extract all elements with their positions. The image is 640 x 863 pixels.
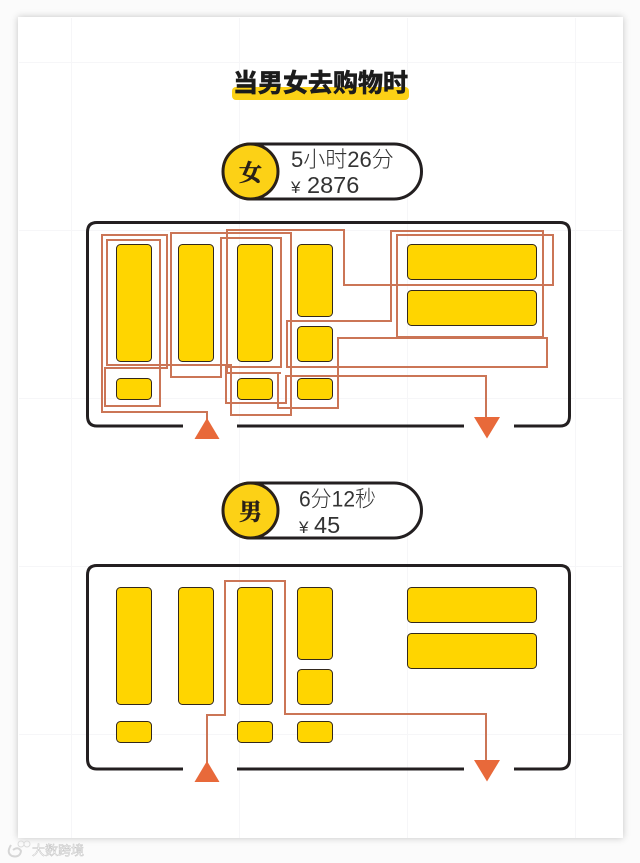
badge: female time and spend: 2876	[307, 172, 359, 198]
badge: female time and spend: ¥	[290, 178, 301, 197]
watermark: 大数跨境	[32, 843, 84, 858]
exit arrow	[474, 760, 500, 782]
store outline	[88, 566, 570, 769]
entrance arrow	[194, 761, 220, 782]
badge: female time and spend: 女	[239, 160, 263, 186]
badge: male time and spend: 男	[239, 500, 262, 524]
badge: male time and spend: ¥	[298, 518, 309, 537]
female walking route	[102, 230, 553, 420]
male walking route	[207, 581, 486, 763]
store outline	[88, 222, 570, 426]
title: 当男女去购物时	[233, 70, 408, 98]
badge: male time and spend	[223, 483, 422, 538]
panel: male shopping floor plan	[88, 566, 570, 782]
exit arrow	[474, 417, 500, 438]
badge: female time and spend: 5小时26分	[291, 147, 394, 172]
shelves	[116, 244, 536, 400]
watermark	[9, 841, 84, 858]
panel: female shopping floor plan	[88, 222, 570, 439]
badge: female time and spend	[223, 144, 422, 199]
shelves	[116, 588, 536, 742]
badge: male time and spend: 6分12秒	[299, 486, 376, 512]
badge: male time and spend: 45	[314, 512, 340, 538]
entrance arrow	[194, 418, 220, 439]
